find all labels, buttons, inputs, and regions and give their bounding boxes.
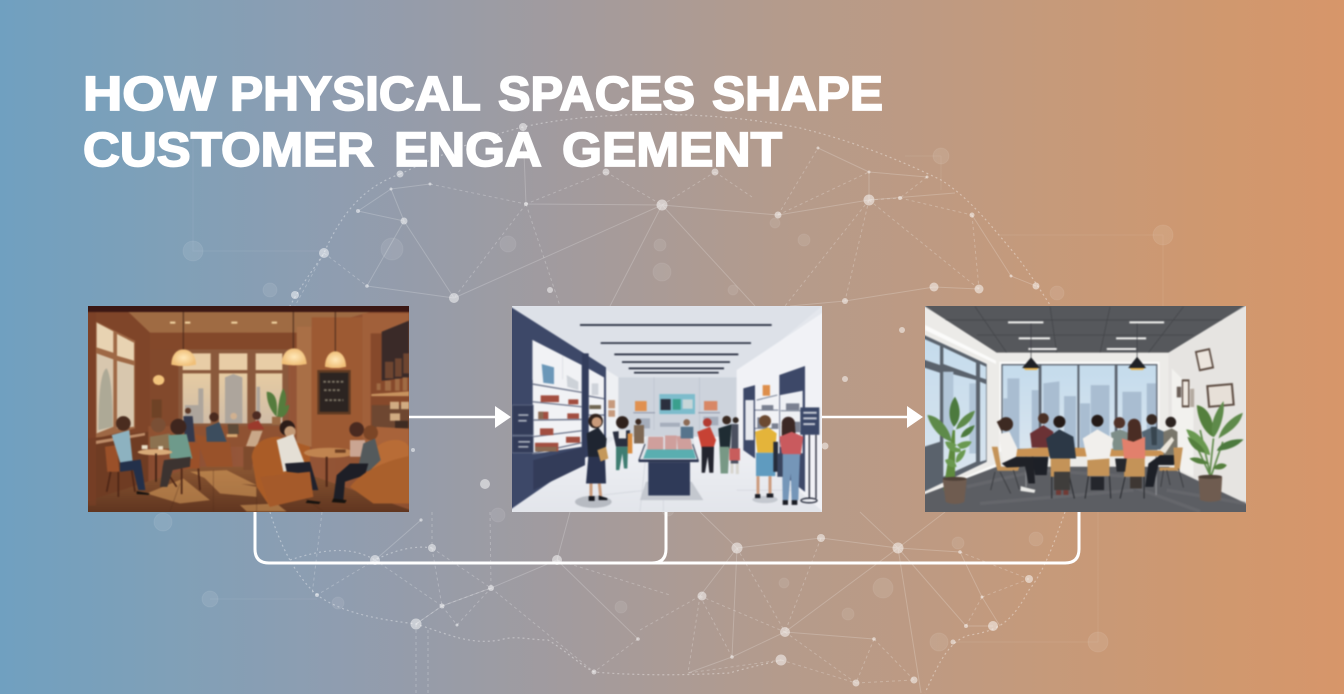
- title: CUSTOMER: [83, 124, 374, 177]
- big armchair group: [252, 437, 310, 507]
- left wall and window: [925, 307, 997, 503]
- title: ENGA: [394, 124, 541, 177]
- scene: warm cafe: [88, 306, 409, 512]
- ceiling: [910, 297, 1260, 353]
- ceiling: [512, 306, 822, 377]
- window sill and floor: [88, 432, 148, 500]
- arrow: cafe to retail store: [409, 406, 511, 428]
- left plant: [943, 430, 955, 490]
- title: HOW: [83, 68, 217, 121]
- second woman: [616, 416, 629, 429]
- bright nodes: [291, 123, 1040, 686]
- title: SPACES: [498, 68, 695, 121]
- ceiling: [128, 312, 370, 333]
- scene: meeting room: [925, 306, 1246, 512]
- right wall: [737, 303, 837, 524]
- scene: modern retail store: [512, 306, 822, 512]
- right plant: [1197, 430, 1223, 477]
- back window: [997, 353, 1168, 466]
- sign stand: [800, 407, 819, 435]
- background guests: [185, 408, 191, 414]
- title: SHAPE: [712, 68, 883, 121]
- back wall: [618, 377, 737, 441]
- back-facing people: [1051, 457, 1070, 477]
- mid shoppers: [635, 419, 641, 425]
- wall columns right: [297, 327, 312, 447]
- floor: [900, 467, 1260, 530]
- faint nodes with tails: [154, 130, 1173, 652]
- title: GEMENT: [562, 124, 782, 177]
- woman in black skirt: [575, 496, 612, 508]
- rear people: [1038, 413, 1049, 424]
- yellow shirt shopper: [752, 496, 778, 503]
- lamps: [183, 312, 335, 352]
- left table guests: [105, 445, 119, 472]
- right wall: [1168, 297, 1260, 524]
- title: PHYSICAL: [230, 68, 480, 121]
- chalkboard: [317, 370, 351, 414]
- pendant lamps: [1031, 323, 1137, 358]
- table: [1015, 447, 1167, 457]
- floor: [512, 437, 822, 530]
- centre display: [639, 436, 698, 462]
- back window: [178, 349, 288, 426]
- arrow: retail store to meeting room: [822, 406, 923, 428]
- bottom connector linking the three scenes: [254, 512, 1080, 564]
- side person left: [992, 447, 1019, 471]
- title: [83, 68, 883, 177]
- pink shirt shopper: [782, 417, 795, 430]
- left navy wall: [500, 300, 606, 517]
- plant: [267, 388, 289, 418]
- left window: [96, 322, 135, 438]
- shelf unit: [382, 321, 409, 381]
